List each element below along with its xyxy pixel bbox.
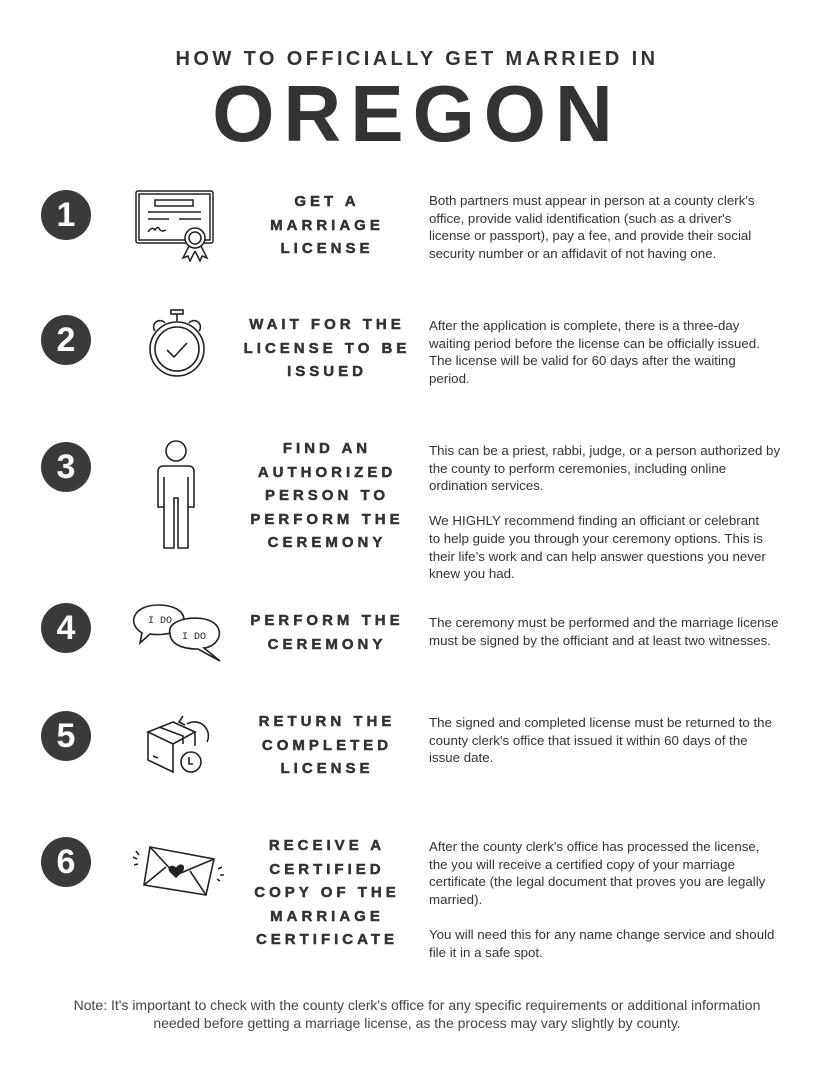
step 3 number — [41, 442, 91, 492]
heading 3: CEREMONY — [268, 534, 386, 551]
icon: speech bubbles: I DO — [182, 632, 206, 643]
heading 5: COMPLETED — [262, 736, 392, 754]
heading 3: FIND AN — [283, 440, 371, 457]
text 2 — [429, 318, 760, 386]
text 3: This can be a priest, rabbi, judge, or a person authorized by — [429, 443, 780, 458]
heading 6: CERTIFIED — [269, 860, 385, 878]
heading 5: RETURN THE — [259, 713, 395, 730]
text 1: security number or an affidavit of not having one. — [429, 246, 716, 261]
title: OREGON — [212, 69, 622, 158]
step 4 number: 4 — [57, 609, 75, 647]
text 3 — [429, 443, 780, 581]
title — [176, 48, 658, 158]
text 1: Both partners must appear in person at a county clerk's — [429, 193, 755, 208]
heading 1: LICENSE — [280, 240, 374, 257]
text 5: issue date. — [429, 750, 493, 765]
text 1: license or passport), pay a fee, and provide their social — [429, 228, 751, 243]
text 6: the you will receive a certified copy of your marriage — [429, 857, 735, 872]
text 1: office, provide valid identification (such as a driver's — [429, 211, 731, 226]
heading 1: MARRIAGE — [270, 216, 384, 234]
step 3 number: 3 — [57, 448, 75, 486]
heading 5 — [259, 713, 395, 777]
heading 6: RECEIVE A — [269, 837, 385, 854]
text 5: The signed and completed license must be returned to the — [429, 715, 772, 730]
icon: speech bubbles — [132, 604, 220, 662]
footer note: Note: It's important to check with the county clerk's office for any specific requirements or additional information — [74, 997, 760, 1013]
heading 3 — [250, 440, 404, 551]
text 3: We HIGHLY recommend finding an officiant or celebrant — [429, 513, 759, 528]
heading 2: ISSUED — [287, 363, 367, 380]
heading 4: PERFORM THE — [250, 612, 404, 629]
heading 4: CEREMONY — [268, 636, 386, 652]
icon: box with clock — [146, 716, 210, 774]
step 5 number — [41, 711, 91, 761]
step 6 number — [41, 837, 91, 887]
text 6 — [429, 839, 774, 960]
text 6: certificate (the legal document that proves you are legally — [429, 874, 765, 889]
text 3: the county to perform ceremonies, including online — [429, 461, 726, 476]
text 2: After the application is complete, there is a three-day — [429, 318, 739, 333]
icon: certificate — [135, 190, 214, 262]
text 3: ordination services. — [429, 478, 544, 493]
step 5 number: 5 — [57, 717, 75, 755]
icon: envelope with heart — [132, 846, 224, 896]
text 3: their life’s work and can help answer questions you never — [429, 549, 766, 564]
heading 6: CERTIFICATE — [256, 931, 398, 948]
text 2: The license will be valid for 60 days after the waiting — [429, 353, 736, 368]
heading 6 — [254, 837, 400, 948]
heading 3: PERSON TO — [265, 487, 389, 504]
step 2 number: 2 — [57, 321, 75, 359]
title: HOW TO OFFICIALLY GET MARRIED IN — [176, 48, 658, 70]
step 1 number: 1 — [57, 196, 75, 234]
heading 1: GET A — [294, 193, 360, 210]
step 2 number — [41, 315, 91, 365]
heading 2: WAIT FOR THE — [249, 316, 405, 333]
text 1 — [429, 193, 755, 261]
step 4 number — [41, 603, 91, 653]
text 4: The ceremony must be performed and the marriage license — [429, 615, 779, 630]
step 1 number — [41, 190, 91, 240]
heading 6: MARRIAGE — [270, 908, 384, 924]
footer note — [74, 997, 760, 1031]
icon: stopwatch — [149, 309, 205, 377]
text 6: married). — [429, 892, 482, 907]
text 5: county clerk's office that issued it within 60 days of the — [429, 733, 748, 748]
heading 1 — [270, 193, 384, 257]
text 3: to help guide you through your ceremony options. This is — [429, 531, 763, 546]
text 6: file it in a safe spot. — [429, 945, 543, 960]
step 6 number: 6 — [57, 843, 75, 881]
heading 6: COPY OF THE — [254, 884, 400, 901]
icon: speech bubbles: I DO — [148, 616, 172, 627]
heading 4 — [250, 612, 404, 652]
footer note: needed before getting a marriage license, as the process may vary slightly by county. — [153, 1015, 681, 1031]
icon: person — [157, 440, 195, 549]
text 6: You will need this for any name change service and should — [429, 927, 774, 942]
text 5 — [429, 715, 772, 765]
heading 3: AUTHORIZED — [258, 464, 396, 480]
heading 5: LICENSE — [280, 760, 374, 777]
text 6: After the county clerk's office has processed the license, — [429, 839, 759, 854]
text 2: waiting period before the license can be officially issued. — [429, 336, 760, 351]
text 2: period. — [429, 371, 470, 386]
heading 2: LICENSE TO BE — [244, 340, 410, 356]
heading 3: PERFORM THE — [250, 510, 404, 528]
text 4 — [429, 615, 779, 648]
text 4: must be signed by the officiant and at least two witnesses. — [429, 633, 771, 648]
text 3: knew you had. — [429, 566, 515, 581]
heading 2 — [244, 316, 410, 380]
